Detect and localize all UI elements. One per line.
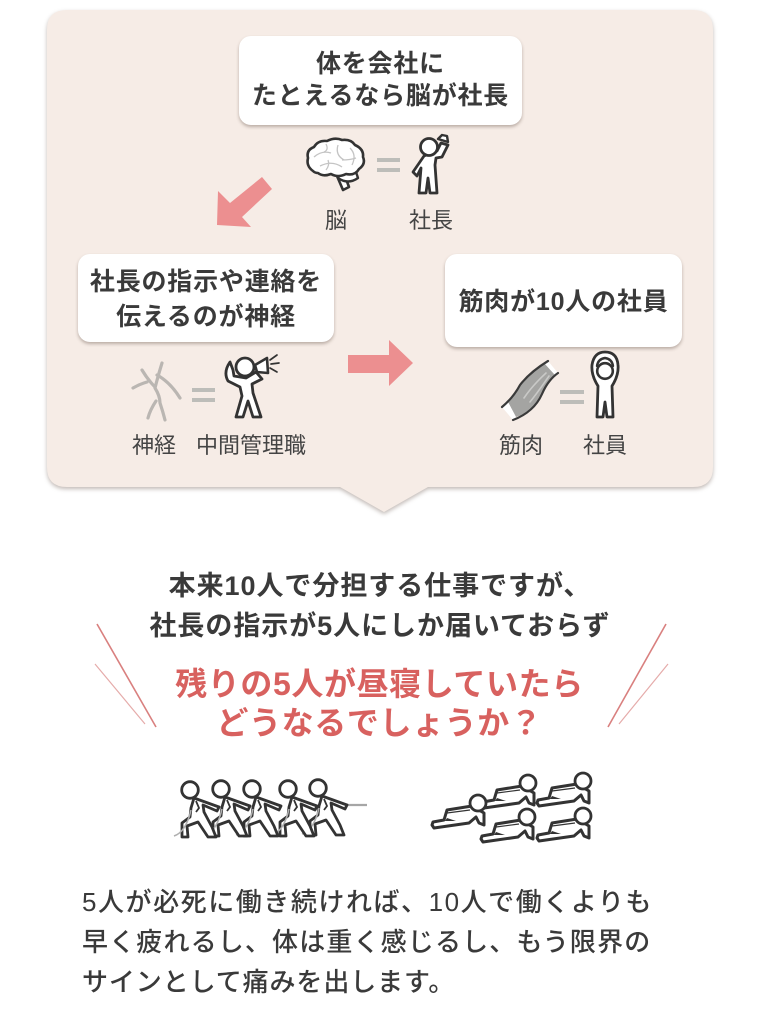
highlighted question: どうなるでしょうか？ bbox=[216, 705, 542, 741]
label: brain: 脳 bbox=[325, 208, 347, 233]
highlighted question bbox=[175, 666, 584, 741]
label: nerve: 神経 bbox=[132, 433, 176, 458]
decorative emphasis lines right bbox=[607, 624, 668, 728]
text: conclusion paragraph: サインとして痛みを出します。 bbox=[82, 967, 455, 997]
text: conclusion paragraph: 5人が必死に働き続ければ、10人で働くよりも bbox=[82, 887, 653, 917]
icon: brain bbox=[306, 137, 366, 192]
label: muscle: 筋肉 bbox=[499, 433, 543, 458]
text: work shared by ten: 本来10人で分担する仕事ですが、 bbox=[169, 571, 591, 601]
highlighted question: 残りの5人が昼寝していたら bbox=[175, 666, 584, 702]
icon: equals between brain and president bbox=[377, 158, 400, 172]
heading: muscles are employees: 筋肉が10人の社員 bbox=[458, 288, 668, 316]
heading: nerves relay instructions bbox=[90, 268, 322, 331]
label: employee: 社員 bbox=[583, 433, 627, 458]
callout: brain is the president bbox=[239, 36, 522, 125]
arrow: right bbox=[348, 340, 413, 386]
heading: nerves relay instructions: 社長の指示や連絡を bbox=[90, 268, 322, 296]
arrow: diagonal down-left bbox=[217, 177, 272, 227]
heading: nerves relay instructions: 伝えるのが神経 bbox=[116, 303, 296, 331]
decorative emphasis lines left bbox=[94, 624, 157, 728]
text: conclusion paragraph bbox=[82, 887, 653, 997]
label: president: 社長 bbox=[409, 208, 453, 233]
icon: muscle bbox=[500, 360, 560, 422]
icon: employee stretching bbox=[590, 350, 620, 418]
text: conclusion paragraph: 早く疲れるし、体は重く感じるし、もう限界の bbox=[82, 927, 651, 957]
callout: nerves bbox=[78, 254, 334, 342]
text: instruction reaches only five: 社長の指示が5人にしか届いておらず bbox=[149, 611, 610, 641]
icon: equals between muscle and employee bbox=[560, 390, 584, 404]
heading: brain is the president: たとえるなら脳が社長 bbox=[252, 82, 509, 110]
panel: body as a company bbox=[44, 10, 716, 516]
icon: equals between nerve and manager bbox=[192, 388, 215, 402]
icon: president figure bbox=[412, 134, 450, 194]
heading: brain is the president bbox=[252, 50, 509, 110]
callout: muscles bbox=[445, 254, 682, 347]
icon: manager with megaphone bbox=[224, 354, 280, 418]
label: middle management: 中間管理職 bbox=[196, 433, 306, 458]
icon: nerve bbox=[131, 361, 182, 422]
heading: brain is the president: 体を会社に bbox=[316, 50, 445, 78]
